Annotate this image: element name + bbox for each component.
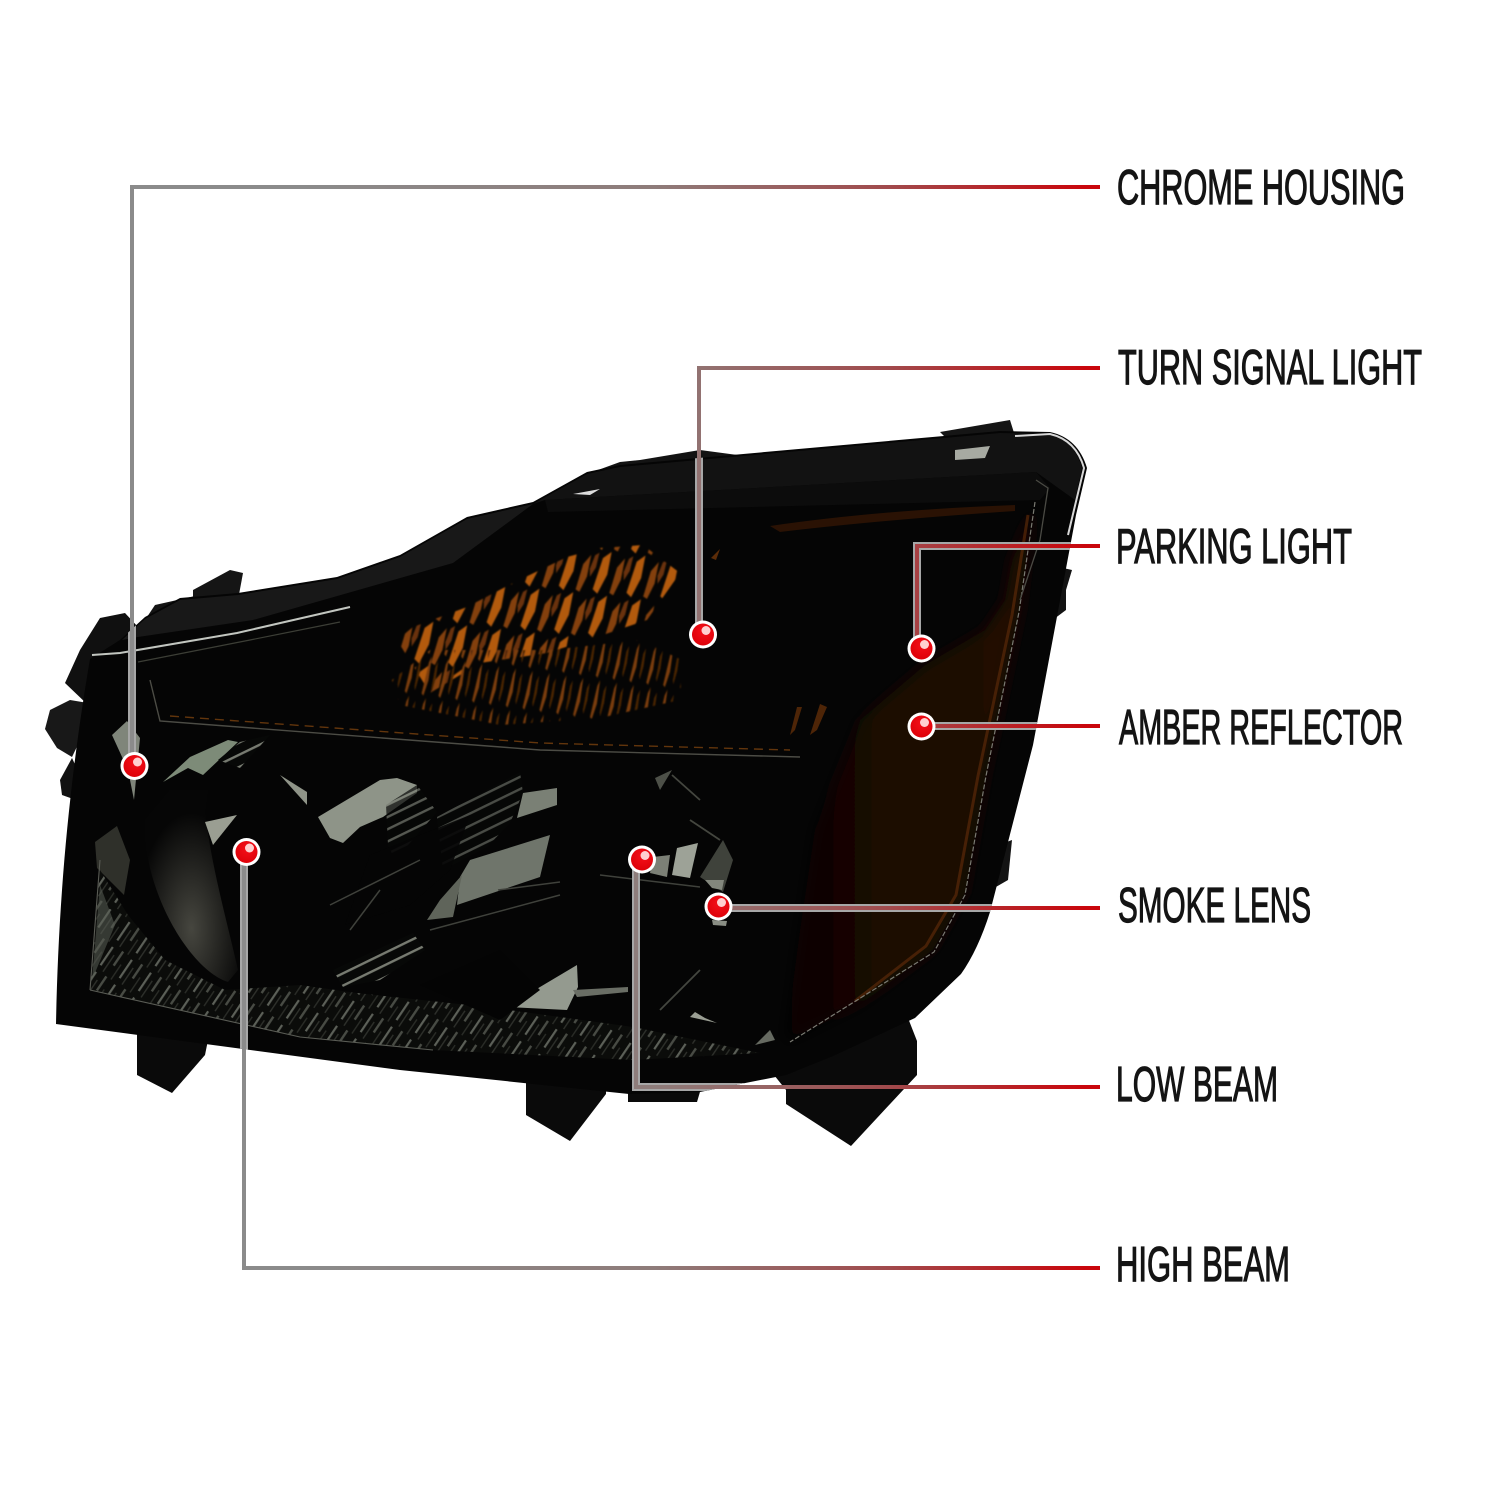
callout lines halo over lamp bbox=[128, 458, 1071, 1091]
marker: amber reflector bbox=[908, 712, 936, 740]
callout line: high beam bbox=[244, 852, 1100, 1268]
lens divider line bbox=[150, 680, 800, 757]
callout line: low beam bbox=[636, 859, 1100, 1087]
callout line: parking light bbox=[917, 546, 1100, 648]
upper housing band bbox=[122, 433, 1082, 640]
marker: low beam bbox=[628, 846, 656, 874]
mounting tabs and connectors bbox=[45, 420, 1072, 1146]
callout line: amber reflector bbox=[921, 724, 1100, 728]
amber panel rim bbox=[855, 515, 1028, 1001]
marker: smoke lens bbox=[704, 892, 732, 920]
marker: parking light bbox=[908, 634, 936, 662]
label: low beam: LOW BEAM bbox=[1116, 1058, 1278, 1112]
callout line: turn signal light bbox=[699, 368, 1100, 635]
lamp body bbox=[56, 431, 1087, 1094]
projector lens bbox=[145, 790, 238, 982]
callout line: chrome housing bbox=[132, 187, 1100, 766]
label: high beam: HIGH BEAM bbox=[1116, 1238, 1290, 1292]
headlamp illustration bbox=[45, 420, 1087, 1146]
marker: turn signal light bbox=[689, 620, 717, 648]
chrome outline glint bbox=[1015, 434, 1084, 535]
dark reflector details bbox=[345, 815, 470, 925]
ribbed reflector chunks bbox=[218, 735, 523, 987]
label: smoke lens: SMOKE LENS bbox=[1118, 879, 1311, 933]
red amber reflector panel bbox=[834, 532, 1030, 1010]
top lens glint bbox=[92, 607, 350, 655]
amber turn signal reflector bbox=[392, 545, 682, 725]
label: parking light: PARKING LIGHT bbox=[1116, 520, 1352, 574]
chrome reflector highlights bbox=[112, 721, 775, 1045]
bottom hatched reflector strip bbox=[90, 870, 760, 1060]
left reflector lobe bbox=[95, 826, 130, 895]
callout line: smoke lens bbox=[718, 906, 1100, 910]
marker: high beam bbox=[232, 838, 260, 866]
marker: chrome housing bbox=[120, 752, 148, 780]
